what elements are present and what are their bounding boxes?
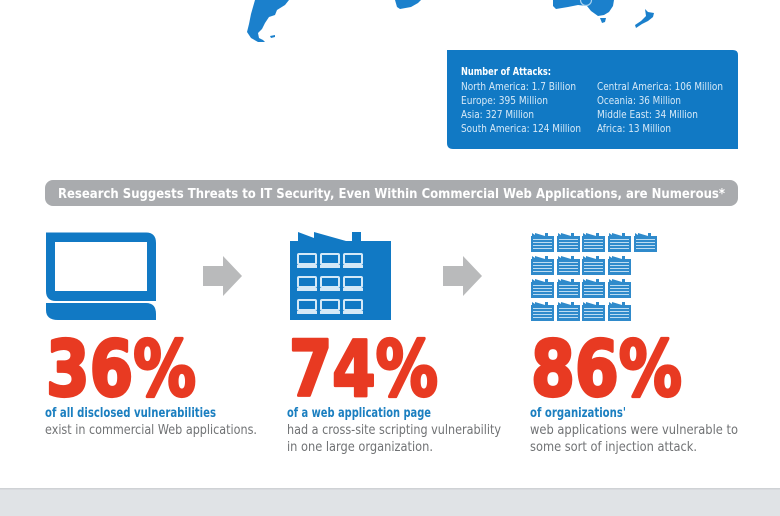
stat 74% caption: in one large organization. <box>287 439 433 455</box>
icon: laptop <box>46 232 156 320</box>
attacks list: left column <box>461 80 581 135</box>
stat: 86% <box>530 326 738 455</box>
stat: 74%: 74% <box>289 326 438 414</box>
stat 86% caption: web applications were vulnerable to <box>530 422 738 438</box>
footer band <box>0 488 780 516</box>
map: Australia <box>553 0 614 16</box>
attacks list: right column: Central America: 106 Million <box>597 80 723 93</box>
attacks list: left column: Asia: 327 Million <box>461 108 534 121</box>
attacks list: right column: Africa: 13 Million <box>597 122 671 135</box>
stat: 86%: 86% <box>531 326 682 414</box>
stat 86% caption: of organizations' <box>530 405 626 421</box>
section heading banner <box>45 180 738 206</box>
stat: 36% <box>45 326 257 438</box>
factory windows <box>298 254 362 310</box>
attacks list: right column: Middle East: 34 Million <box>597 108 698 121</box>
attacks list: right column <box>597 80 723 135</box>
icon: grid of factories <box>531 233 657 321</box>
map: Tasmania <box>600 18 606 23</box>
stat: 74% <box>287 326 501 455</box>
attacks list: left column: South America: 124 Million <box>461 122 581 135</box>
attacks list: right column: Oceania: 36 Million <box>597 94 681 107</box>
map: New Zealand <box>635 9 654 28</box>
attacks list: left column: Europe: 395 Million <box>461 94 548 107</box>
map: Africa tip <box>395 0 421 9</box>
stat 36% caption: of all disclosed vulnerabilities <box>45 405 216 421</box>
map: Falkland Islands <box>270 35 275 38</box>
icon: factory of laptops <box>290 232 391 320</box>
stat: 36%: 36% <box>46 326 196 414</box>
arrow 1 <box>203 256 242 296</box>
map: attack marker ring <box>580 0 592 6</box>
stat 74% caption: had a cross-site scripting vulnerability <box>287 422 501 438</box>
map: South America tip <box>247 0 289 42</box>
stat 86% caption: some sort of injection attack. <box>530 439 697 455</box>
stat 74% caption <box>287 405 501 455</box>
stat 36% caption <box>45 405 257 438</box>
panel heading: Number of Attacks: <box>461 65 551 78</box>
stat 86% caption <box>530 405 738 455</box>
attacks list: left column: North America: 1.7 Billion <box>461 80 576 93</box>
stat 36% caption: exist in commercial Web applications. <box>45 422 257 438</box>
world map fragment <box>247 0 654 42</box>
factory window bases <box>297 265 363 314</box>
panel: number of attacks <box>447 50 738 149</box>
arrow 2 <box>443 256 482 296</box>
stat 74% caption: of a web application page <box>287 405 431 421</box>
